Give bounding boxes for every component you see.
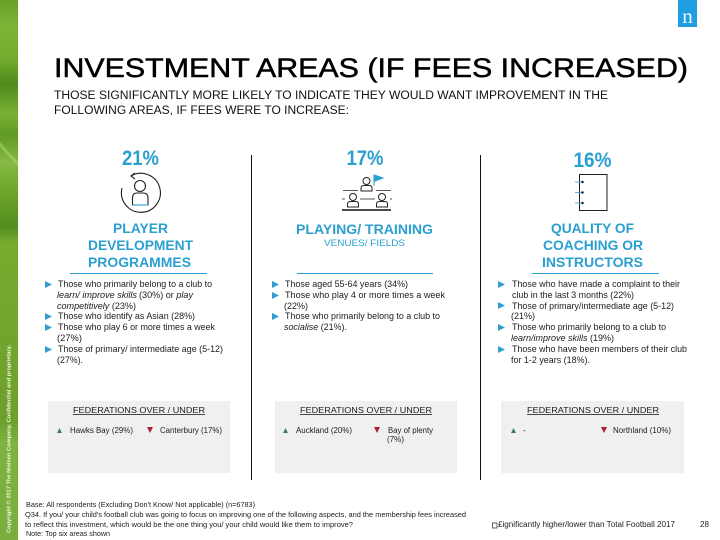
- copyright text: Copyright © 2017 The Nielsen Company. Confidential and proprietary.: [6, 345, 12, 533]
- footnotes: Base: All respondents (Excluding Don't Know/ Not applicable) (n=6783): [26, 500, 255, 509]
- heading: [88, 221, 194, 270]
- bullet list: Those of primary/ intermediate age (5-12): [58, 344, 223, 354]
- panel: player development: [45, 147, 230, 473]
- footnotes: Note: Top six areas shown: [26, 529, 110, 538]
- bullet list: Those who identify as Asian (28%): [58, 311, 195, 321]
- federations box: Northland (10%): [613, 426, 671, 435]
- federations box: [48, 401, 230, 473]
- bullet list: Those who primarily belong to a club to: [285, 311, 440, 321]
- federations box: FEDERATIONS OVER / UNDER: [527, 406, 659, 415]
- federations box: Hawks Bay (29%): [70, 426, 133, 435]
- page number: 28: [700, 519, 709, 529]
- subtitle: THOSE SIGNIFICANTLY MORE LIKELY TO INDICATE THEY WOULD WANT IMPROVEMENT IN THE: [54, 90, 608, 102]
- heading: INSTRUCTORS: [542, 255, 643, 270]
- federations box: [501, 401, 684, 473]
- footnotes: to reflect this investment, which would be the one thing you/ your child would like them to improve?: [25, 520, 353, 529]
- bullet list: Those of primary/intermediate age (5-12): [512, 301, 674, 311]
- bullet list: (27%): [57, 333, 82, 343]
- bullet list: [45, 279, 223, 365]
- bullet list: for 1-2 years (18%).: [511, 355, 590, 365]
- bullet list: (27%).: [57, 355, 83, 365]
- bullet list: Those aged 55-64 years (34%): [285, 279, 408, 289]
- subtitle: [54, 90, 608, 117]
- bullet list: Those who play 4 or more times a week: [285, 290, 446, 300]
- federations box: Bay of plenty: [388, 426, 433, 435]
- heading: PROGRAMMES: [88, 255, 191, 270]
- bullet list: Those who play 6 or more times a week: [58, 322, 216, 332]
- heading: DEVELOPMENT: [88, 238, 194, 253]
- panel: playing / training: [272, 147, 457, 473]
- subtitle: FOLLOWING AREAS, IF FEES WERE TO INCREASE:: [54, 105, 349, 117]
- federations box: [275, 401, 457, 473]
- federations box: Auckland (20%): [296, 426, 352, 435]
- bullet list: Those who primarily belong to a club to: [512, 322, 666, 332]
- federations box: FEDERATIONS OVER / UNDER: [300, 406, 432, 415]
- heading: COACHING OR: [543, 238, 643, 253]
- percentage 16%: 16%: [574, 149, 612, 172]
- icon: notebook: [575, 174, 607, 210]
- icon: Nielsen logo: [678, 0, 697, 28]
- bullet list: (22%): [284, 301, 308, 311]
- bullet list: [272, 279, 446, 332]
- significance legend: £ignificantly higher/lower than Total Football 2017: [498, 520, 676, 529]
- heading: PLAYER: [113, 221, 168, 236]
- icon: players and flag: [342, 175, 392, 210]
- percentage 17%: 17%: [346, 147, 384, 170]
- bullet list: [498, 279, 687, 365]
- heading: VENUES/ FIELDS: [324, 238, 405, 248]
- panel: quality of coaching: [498, 149, 687, 473]
- bullet list: learn/ improve skills: [57, 290, 138, 300]
- bullet list: (30%) or play: [139, 290, 194, 300]
- footnotes: [25, 500, 466, 538]
- federations box: -: [523, 426, 526, 435]
- bullet list: (21%): [511, 311, 535, 321]
- column dividers: [252, 155, 480, 480]
- icon: Nielsen logo: n: [682, 4, 693, 28]
- bullet list: Those who primarily belong to a club to: [58, 279, 212, 289]
- bullet list: Those who have made a complaint to their: [512, 279, 680, 289]
- bullet list: learn/improve skills (19%): [511, 333, 614, 343]
- heading: [542, 221, 643, 270]
- heading: QUALITY OF: [551, 221, 634, 236]
- bullet list: socialise (21%).: [284, 322, 347, 332]
- bullet list: competitively (23%): [57, 301, 136, 311]
- heading: PLAYING/ TRAINING: [296, 222, 433, 237]
- federations box: (7%): [387, 435, 404, 444]
- bullet list: club in the last 3 months (22%): [512, 290, 634, 300]
- federations box: FEDERATIONS OVER / UNDER: [73, 406, 205, 415]
- sidebar: green band with copyright: [0, 0, 18, 540]
- icon: player in circle: [121, 173, 160, 212]
- footnotes: Q34. If you/ your child's football club was going to focus on improving one of the following aspects, and the membership fees increased: [25, 510, 466, 519]
- title: INVESTMENT AREAS (IF FEES INCREASED): [54, 53, 688, 83]
- federations box: Canterbury (17%): [160, 426, 222, 435]
- percentage 21%: 21%: [122, 147, 159, 170]
- heading: [296, 222, 433, 248]
- bullet list: Those who have been members of their club: [512, 344, 687, 354]
